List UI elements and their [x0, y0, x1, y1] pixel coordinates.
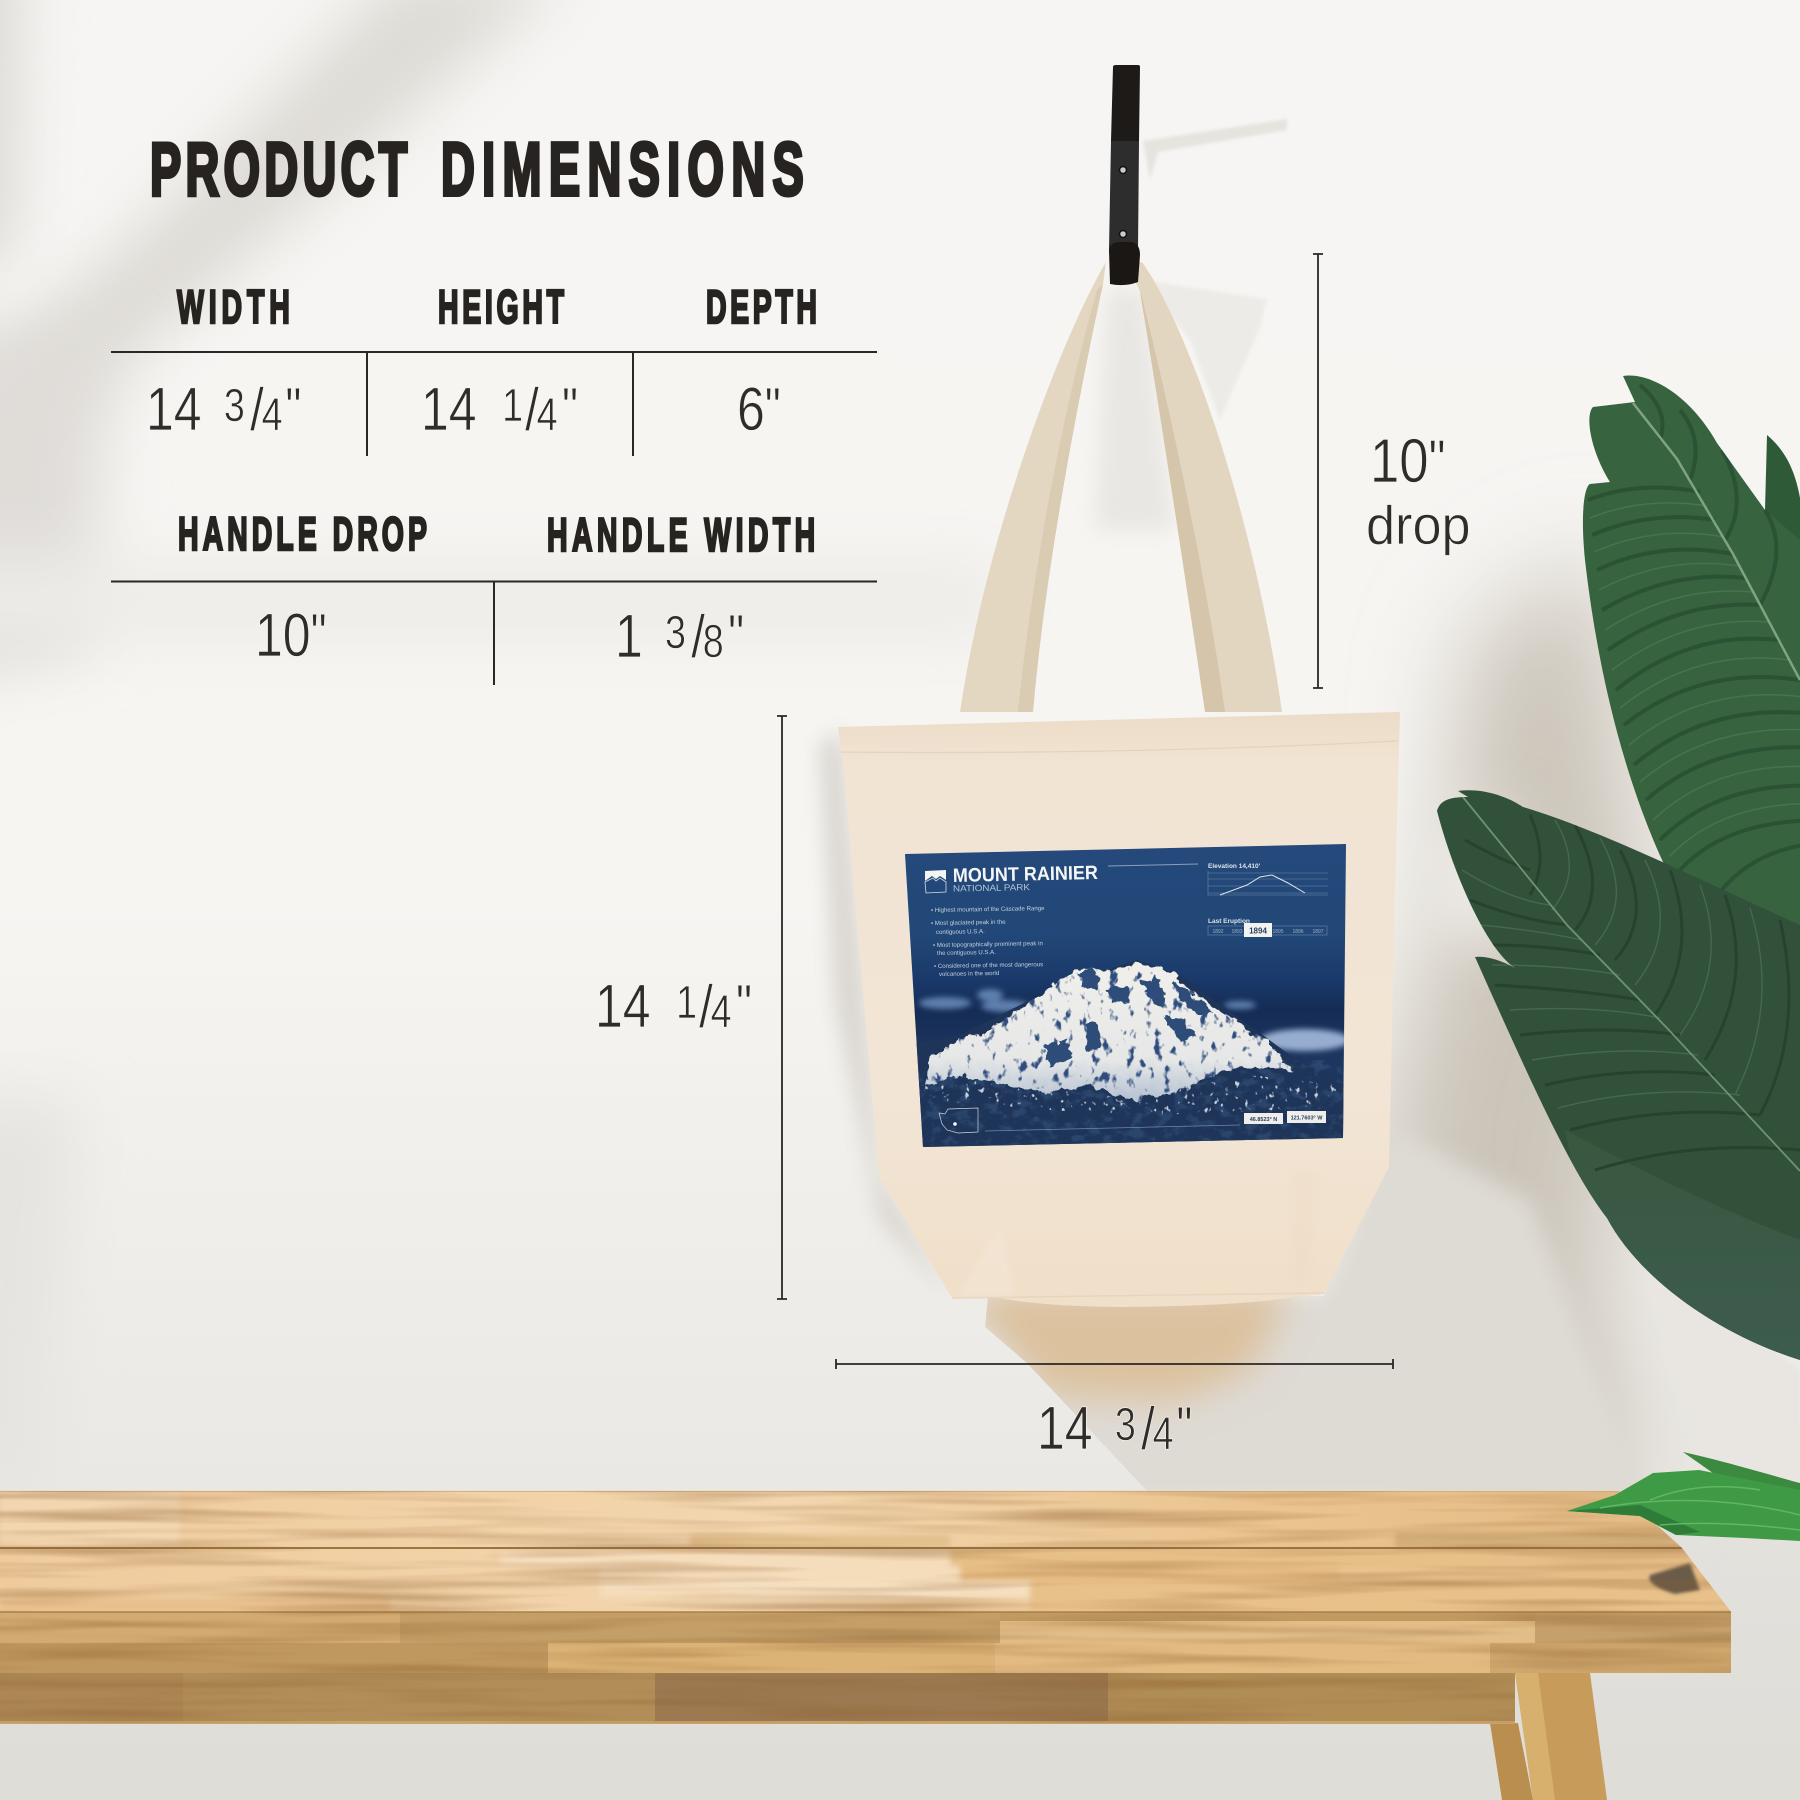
strap shadow on wall	[1095, 290, 1175, 530]
label: width: 3	[1115, 1398, 1136, 1450]
tote strap back	[1135, 262, 1240, 712]
value: width: 4	[262, 388, 283, 440]
coordinate labels: 46.8523° N	[1250, 1117, 1277, 1123]
tote bag shadow	[820, 730, 1800, 1500]
heading: height: HEIGHT	[438, 282, 564, 334]
label: 10 inch drop	[1366, 427, 1471, 556]
coordinate labels: 121.7603° W	[1291, 1116, 1323, 1122]
plant leaf bright on bench	[1567, 1452, 1800, 1541]
coordinate labels	[1244, 1111, 1326, 1124]
tote body	[838, 712, 1400, 1307]
label: width: 14	[1037, 1394, 1093, 1462]
panel bullet list: contiguous U.S.A.	[936, 928, 985, 936]
label: height: 1	[676, 976, 697, 1028]
label: 10 inch drop: drop	[1366, 495, 1471, 556]
heading: handle drop: HANDLE DROP	[178, 509, 427, 561]
last eruption timeline	[1208, 918, 1327, 937]
value: height: "	[562, 376, 578, 438]
label: width: "	[1176, 1395, 1192, 1457]
table: handle drop, handle width	[111, 509, 877, 685]
value: depth: 6	[737, 375, 765, 443]
bench rear leg	[1490, 1723, 1533, 1800]
elevation chart	[1208, 863, 1328, 895]
value: handle width: 8	[703, 615, 724, 667]
heading: width: WIDTH	[177, 282, 290, 334]
value: width: "	[285, 376, 301, 438]
title: PRODUCT	[150, 128, 407, 212]
last eruption timeline: 1894	[1249, 926, 1267, 936]
dimension line: height	[777, 716, 787, 1299]
value: height: 14	[421, 375, 477, 443]
shadow on wall beside bag	[820, 730, 950, 1296]
state map	[939, 1108, 978, 1133]
panel bullet list: • Most topographically prominent peak in	[933, 940, 1043, 949]
panel bullet list: volcanoes in the world	[939, 970, 999, 978]
bench front edge	[0, 1612, 1731, 1673]
heading: depth: DEPTH	[706, 282, 817, 334]
tote strap left	[960, 262, 1106, 712]
label: 10 inch drop: 10	[1370, 427, 1429, 496]
value: width: /	[250, 375, 264, 443]
mountain rock patches	[1044, 968, 1212, 1066]
mountain snow	[925, 964, 1292, 1100]
value: depth: "	[765, 376, 781, 438]
shadow beneath bag: grey wall	[986, 1146, 1607, 1490]
panel bullet list: the contiguous U.S.A.	[937, 949, 996, 957]
panel bullet list: • Most glaciated peak in the	[931, 919, 1006, 927]
panel bullet list	[931, 905, 1045, 978]
tote bag	[838, 262, 1400, 1307]
value: handle width: /	[691, 602, 706, 670]
table: width, height, depth	[111, 282, 877, 456]
value: handle width: "	[728, 603, 744, 665]
bench top surface	[0, 1491, 1731, 1612]
bench apron	[0, 1673, 1515, 1724]
last eruption timeline: 1897	[1312, 929, 1324, 935]
tote strap right	[1130, 262, 1282, 712]
panel logo	[925, 870, 946, 893]
wall hook shadow	[1142, 119, 1287, 420]
elevation chart: Elevation 14,410'	[1208, 863, 1261, 870]
wood grain	[0, 1491, 1731, 1723]
heading: handle width: HANDLE WIDTH	[547, 510, 815, 562]
clouds	[919, 989, 1350, 1051]
plant leaf lower	[1437, 790, 1800, 1370]
panel bullet list: • Considered one of the most dangerous	[934, 961, 1043, 970]
last eruption timeline: 1892	[1212, 929, 1224, 935]
panel title: MOUNT RAINIER	[953, 862, 1098, 887]
bench	[0, 1491, 1731, 1800]
value: width: 14	[146, 375, 202, 443]
last eruption timeline: 1895	[1272, 929, 1284, 935]
value: handle width: 1	[615, 602, 643, 670]
value: height: /	[525, 375, 539, 443]
printed panel: Mount Rainier	[905, 844, 1350, 1147]
panel subtitle: NATIONAL PARK	[953, 882, 1030, 893]
label: width: 4	[1153, 1407, 1174, 1459]
value: width: 3	[224, 379, 245, 431]
value: handle drop: "	[311, 602, 327, 664]
value: handle drop: 10	[255, 601, 311, 669]
value: handle width: 3	[665, 606, 686, 658]
last eruption timeline: 1896	[1292, 929, 1304, 935]
label: height: /	[699, 972, 713, 1040]
bench front leg	[1515, 1673, 1607, 1800]
value: height: 4	[537, 388, 558, 440]
dimension line: handle drop	[1313, 254, 1323, 688]
foreground snow specks	[924, 1074, 1336, 1116]
title: DIMENSIONS	[441, 128, 804, 212]
panel bullet list: • Highest mountain of the Cascade Range	[931, 905, 1045, 914]
value: height: 1	[502, 379, 523, 431]
mountain base	[905, 960, 1346, 1147]
hook	[1109, 65, 1140, 285]
label: height: "	[736, 973, 752, 1035]
label: height: 14	[595, 972, 651, 1040]
last eruption timeline: Last Eruption	[1208, 918, 1250, 925]
shadow beneath bag: warm cast	[960, 1290, 1290, 1400]
label: 10 inch drop: "	[1429, 429, 1446, 492]
label: height: 4	[711, 985, 732, 1037]
foreground rock texture	[905, 1060, 1346, 1147]
label: width: /	[1141, 1394, 1155, 1462]
title	[150, 128, 804, 212]
plant leaf upper	[1583, 376, 1800, 925]
dimension line: width	[836, 1359, 1393, 1369]
last eruption timeline: 1893	[1231, 929, 1243, 935]
